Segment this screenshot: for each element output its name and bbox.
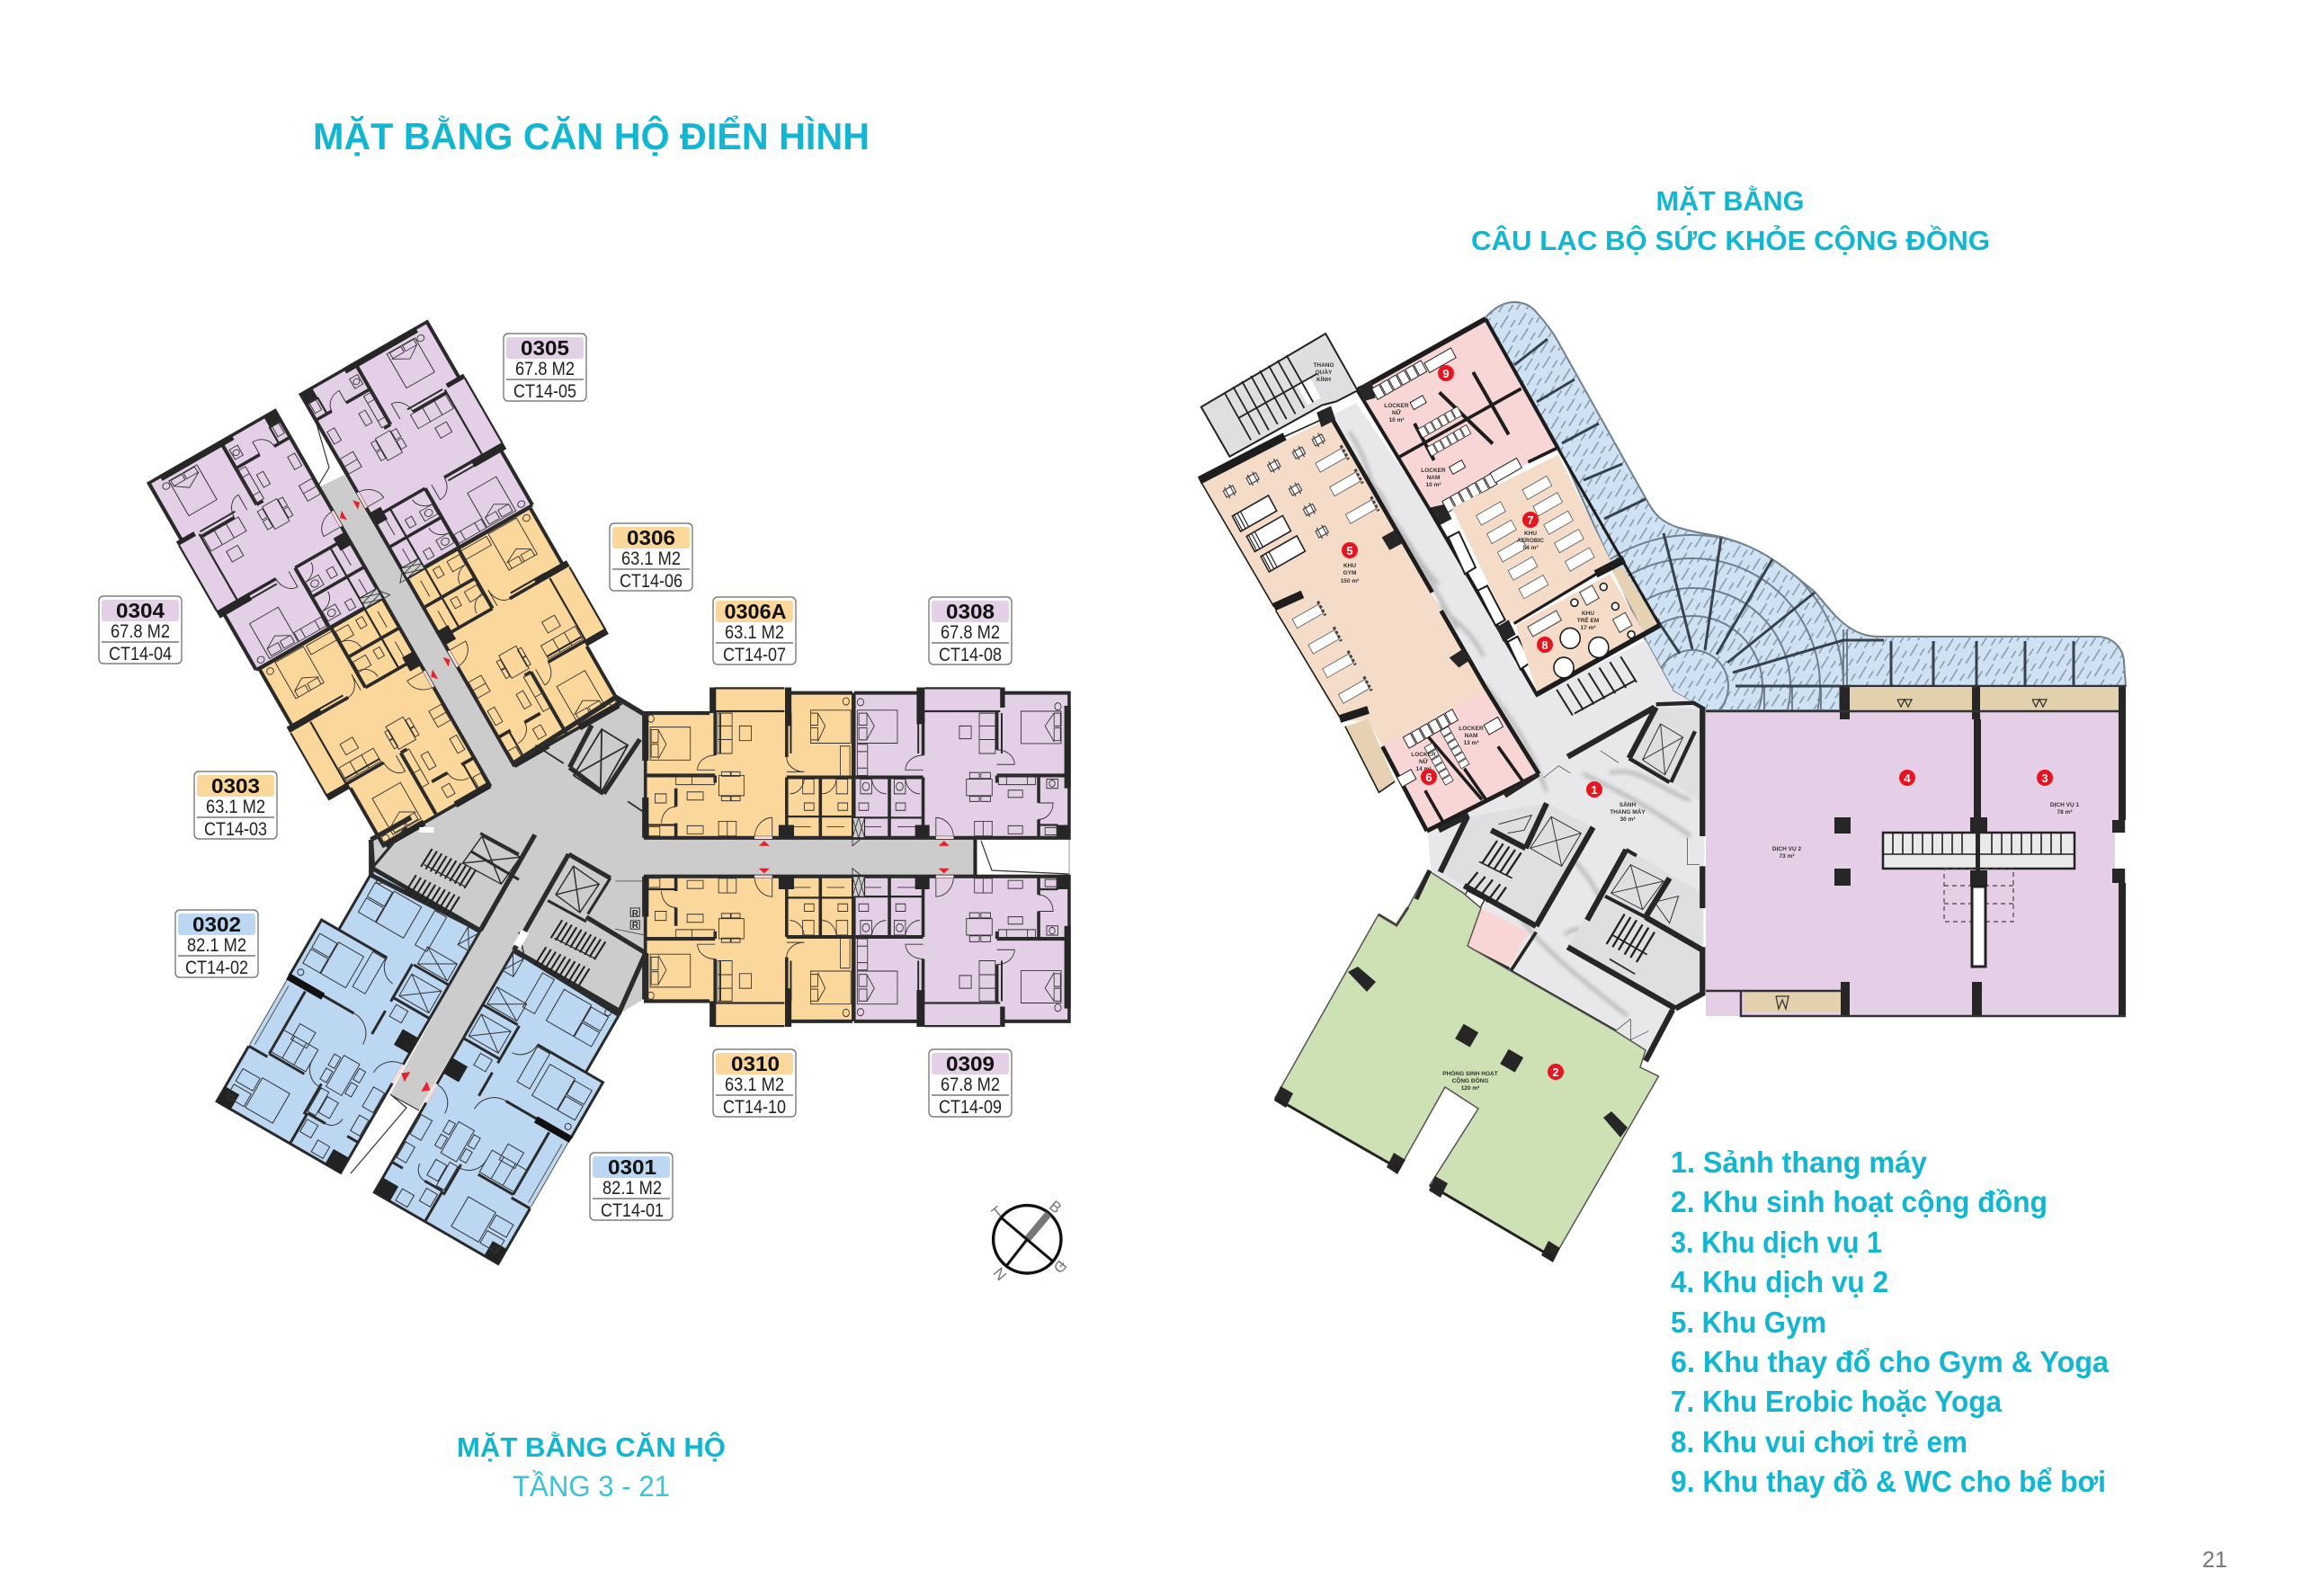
legend list: 6. Khu thay đổ cho Gym & Yoga <box>1671 1345 2110 1378</box>
label 0301: CT14-01 <box>601 1200 664 1221</box>
unit 0310 <box>642 869 852 1027</box>
numbered markers: 4 <box>1904 771 1911 785</box>
heading: community wellness club plan <box>1471 185 1990 256</box>
label 0301: 0301 <box>608 1155 656 1179</box>
room labels: PHÒNG SINH HOẠT <box>1442 1069 1498 1077</box>
label 0308: CT14-08 <box>939 645 1002 665</box>
label 0306: 0306 <box>627 526 675 549</box>
label 0306: CT14-06 <box>620 571 683 592</box>
unit 0309 <box>852 869 1071 1027</box>
service room 4 <box>1706 711 1976 1016</box>
room labels: 78 m² <box>2057 809 2073 816</box>
numbered markers: 5 <box>1346 544 1353 557</box>
room labels: NAM <box>1465 733 1477 739</box>
icon: compass <box>988 1197 1070 1283</box>
legend list: 9. Khu thay đồ & WC cho bể bơi <box>1671 1465 2106 1498</box>
caption: apartment floors: MẶT BẰNG CĂN HỘ <box>457 1431 726 1463</box>
legend list: 5. Khu Gym <box>1671 1306 1826 1339</box>
label 0303: CT14-03 <box>204 819 267 840</box>
unit 0308 <box>852 688 1071 846</box>
numbered markers: 8 <box>1541 638 1548 652</box>
icon: compass: B <box>1046 1197 1065 1217</box>
icon: compass: Đ <box>1049 1257 1070 1276</box>
label 0310: 63.1 M2 <box>725 1074 784 1095</box>
label 0306A: CT14-07 <box>723 645 786 665</box>
unit 0306 <box>400 505 643 771</box>
numbered markers: 2 <box>1552 1065 1559 1079</box>
kids room <box>1516 450 1660 695</box>
heading: community wellness club plan: MẶT BẰNG <box>1656 185 1804 217</box>
label 0310 <box>713 1049 796 1118</box>
stair to roof <box>1201 334 1637 716</box>
numbered markers: 9 <box>1442 367 1450 380</box>
unit 0301 <box>366 945 638 1264</box>
core upper elevator and walls <box>370 697 646 869</box>
room labels: 120 m² <box>1461 1085 1480 1092</box>
label 0304: 67.8 M2 <box>111 621 170 642</box>
label 0309 <box>929 1049 1012 1118</box>
room labels: 17 m² <box>1581 625 1596 631</box>
label 0305: 67.8 M2 <box>515 359 575 379</box>
label 0302 <box>175 910 258 978</box>
community room <box>1274 870 1658 1262</box>
numbered markers: 1 <box>1591 783 1598 797</box>
room labels: LOCKER <box>1411 752 1436 758</box>
floor plan: typical apartment floor <box>143 317 1071 1264</box>
legend list: 3. Khu dịch vụ 1 <box>1671 1226 1882 1259</box>
label 0308: 0308 <box>946 600 995 623</box>
label 0310: 0310 <box>731 1052 780 1075</box>
room labels: 13 m² <box>1464 740 1479 746</box>
label 0308 <box>929 597 1012 665</box>
numbered markers: 7 <box>1527 513 1534 527</box>
service room walls and stair <box>1706 686 2127 1016</box>
room labels: 150 m² <box>1341 578 1360 584</box>
label 0303 <box>194 771 277 840</box>
room labels: 30 m² <box>1620 816 1636 823</box>
label 0304: 0304 <box>116 599 165 622</box>
numbered markers: 3 <box>2041 771 2048 785</box>
room labels: DỊCH VỤ 1 <box>2050 802 2079 808</box>
legend list: 1. Sảnh thang máy <box>1671 1146 1928 1179</box>
lower gym lockers <box>1382 688 1539 831</box>
label 0305: CT14-05 <box>513 381 576 402</box>
unit 0303 <box>255 595 498 861</box>
caption: apartment floors: TẦNG 3 - 21 <box>513 1470 670 1502</box>
legend list: 2. Khu sinh hoạt cộng đồng <box>1671 1185 2048 1218</box>
room labels: LOCKER <box>1459 726 1484 732</box>
numbered markers <box>1342 365 2053 1080</box>
label 0301: 82.1 M2 <box>602 1178 662 1199</box>
icon: compass: N <box>990 1264 1011 1283</box>
room labels: AEROBIC <box>1517 538 1544 544</box>
label 0303: 63.1 M2 <box>206 797 265 817</box>
unit 0306A <box>642 688 852 846</box>
icon: compass: T <box>988 1203 1006 1222</box>
label 0308: 67.8 M2 <box>941 622 1000 643</box>
label 0309: CT14-09 <box>939 1097 1002 1118</box>
label 0306A <box>713 597 796 665</box>
unit 0304 <box>143 406 390 674</box>
label 0306A: 63.1 M2 <box>725 622 784 643</box>
room labels: CỘNG ĐỒNG <box>1452 1075 1488 1084</box>
room labels: LOCKER <box>1384 403 1409 409</box>
circulation core <box>317 475 974 1110</box>
label 0304 <box>99 596 182 664</box>
label 0305: 0305 <box>521 336 569 360</box>
label 0302: 82.1 M2 <box>187 935 246 956</box>
label 0302: CT14-02 <box>185 958 248 978</box>
room labels: DỊCH VỤ 2 <box>1772 846 1801 852</box>
room labels: LOCKER <box>1421 468 1446 474</box>
room labels: SẢNH <box>1619 800 1637 808</box>
service riser marks: R <box>632 921 639 931</box>
room labels: 10 m² <box>1426 482 1441 488</box>
title: typical apartment plan: MẶT BẰNG CĂN HỘ ĐIỂN HÌNH <box>313 114 870 157</box>
room labels <box>1313 362 2079 1092</box>
unit 0305 <box>293 317 538 583</box>
marble lobby and corridor <box>1331 403 1706 1052</box>
numbered markers: 6 <box>1425 771 1432 784</box>
label 0306A: 0306A <box>725 600 786 623</box>
balconies <box>1744 688 2119 1012</box>
label 0301 <box>590 1153 673 1221</box>
label 0303: 0303 <box>211 774 260 798</box>
legend list: 8. Khu vui chơi trẻ em <box>1671 1425 1967 1458</box>
aerobic room <box>1429 455 1624 695</box>
label 0306: 63.1 M2 <box>621 548 681 569</box>
label 0306 <box>610 523 692 592</box>
room labels: 14 m² <box>1416 766 1432 772</box>
room labels: 54 m² <box>1523 545 1539 551</box>
label 0302: 0302 <box>192 913 241 936</box>
gym room <box>1200 406 1487 792</box>
room labels: GYM <box>1343 570 1356 576</box>
caption: apartment floors <box>457 1431 726 1502</box>
legend list <box>1671 1146 2110 1498</box>
legend list: 7. Khu Erobic hoặc Yoga <box>1671 1385 2003 1418</box>
unit 0302 <box>216 859 489 1178</box>
service riser marks: R <box>632 909 639 919</box>
legend list: 4. Khu dịch vụ 2 <box>1671 1265 1888 1298</box>
label 0309: 67.8 M2 <box>941 1074 1000 1095</box>
core blocks <box>1439 703 1704 1061</box>
room labels: TRẺ EM <box>1577 616 1599 624</box>
room labels: KHU <box>1582 611 1594 617</box>
label 0305 <box>504 334 586 402</box>
glass roof <box>1485 301 2128 710</box>
room labels: KHU <box>1343 563 1356 569</box>
room labels: THANG MÁY <box>1610 807 1646 816</box>
label 0304: CT14-04 <box>109 644 172 664</box>
core lower elevators and stairs <box>371 827 646 1014</box>
north wing end and east wing end lines <box>308 396 1069 1173</box>
label 0309: 0309 <box>946 1052 995 1075</box>
room labels: QUẦY <box>1316 367 1333 376</box>
room labels: 73 m² <box>1780 853 1795 860</box>
room labels: KHU <box>1524 531 1537 537</box>
room labels: 10 m² <box>1389 417 1405 424</box>
floor plan: community club <box>1200 302 2127 1262</box>
room labels: NỮ <box>1392 408 1402 416</box>
label 0310: CT14-10 <box>723 1097 786 1118</box>
room labels: THANG <box>1313 362 1334 369</box>
heading: community wellness club plan: CÂU LẠC BỘ SỨC KHỎE CỘNG ĐỒNG <box>1471 224 1990 256</box>
upper locker rooms <box>1358 319 1558 526</box>
service riser marks <box>632 909 639 931</box>
room labels: NỮ <box>1419 757 1429 765</box>
service room 3 <box>1976 711 2126 1016</box>
room labels: NAM <box>1427 475 1440 481</box>
room labels: KÍNH <box>1316 375 1331 383</box>
page number: 21 <box>2202 1547 2227 1573</box>
